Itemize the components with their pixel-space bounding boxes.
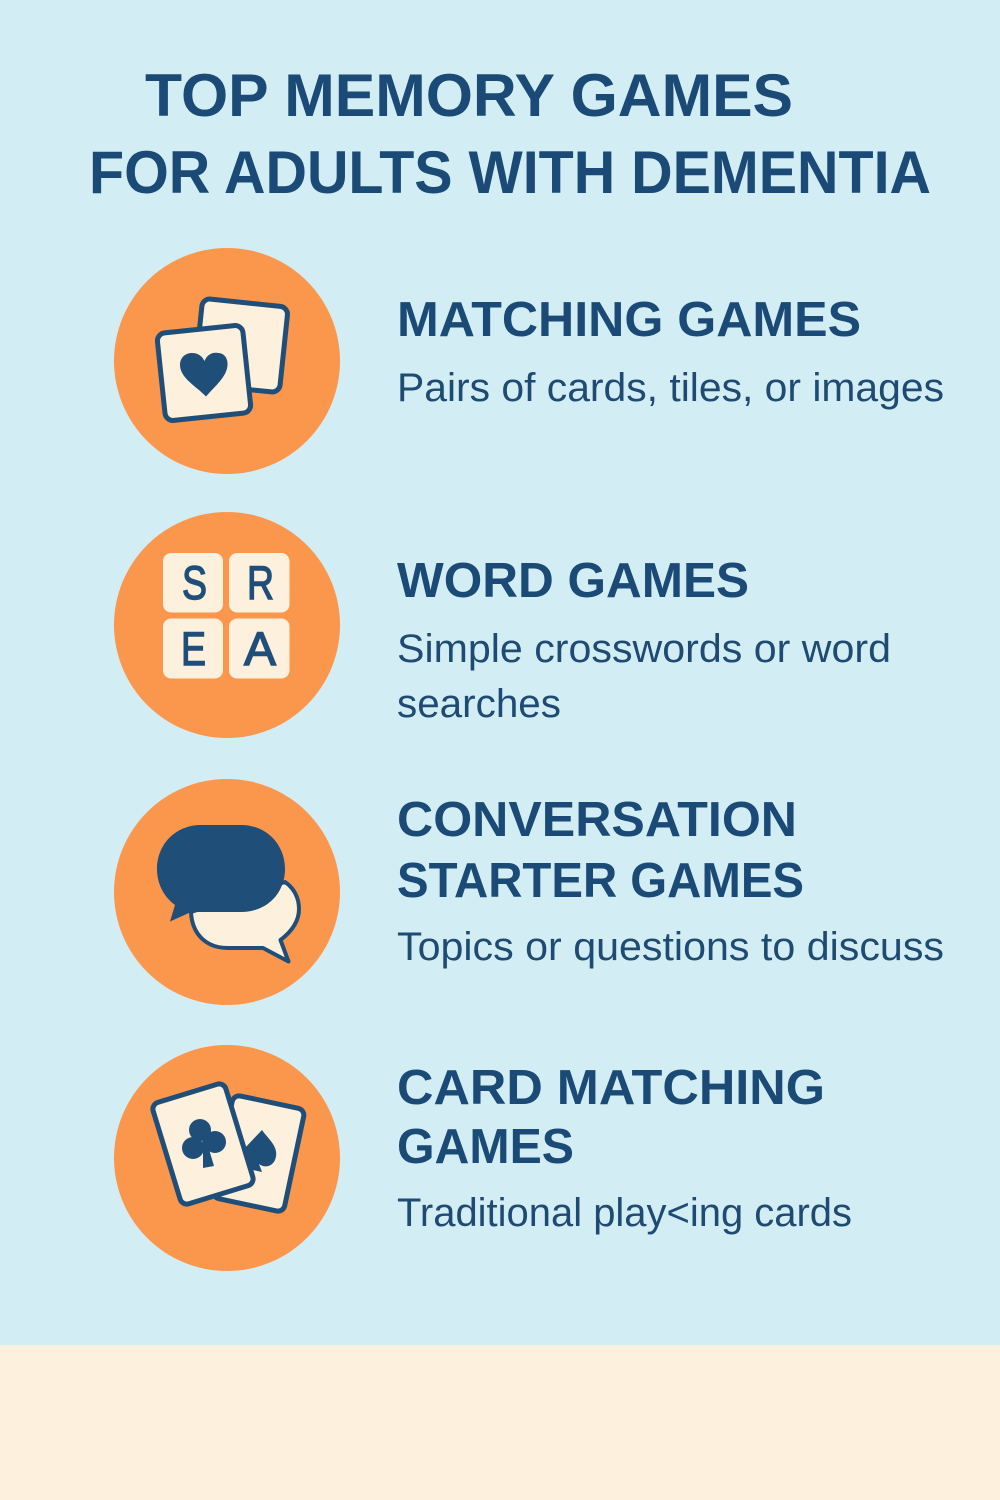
- footer band: cream: [0, 1345, 1000, 1500]
- panel: matching games: [114, 248, 944, 474]
- icon: letter tiles: A: [244, 622, 277, 675]
- heading: [397, 1061, 825, 1174]
- icon: letter tiles: S: [182, 556, 207, 609]
- description: Topics or questions to discuss: [397, 925, 944, 969]
- heading: MATCHING GAMES: [397, 293, 861, 347]
- title: [89, 62, 931, 206]
- heading: [397, 793, 804, 908]
- icon: letter tiles: R: [247, 556, 274, 609]
- panel: card matching games: [114, 1045, 852, 1271]
- description: Traditional play<ing cards: [397, 1191, 852, 1235]
- icon: two cards with heart: [114, 248, 340, 474]
- heading: CARD MATCHING: [397, 1061, 825, 1115]
- heading: CONVERSATION: [397, 793, 797, 847]
- heading: WORD GAMES: [397, 554, 749, 608]
- icon: letter tiles: E: [181, 622, 206, 675]
- icon: speech bubbles: [114, 779, 340, 1005]
- title: TOP MEMORY GAMES: [145, 62, 793, 129]
- panel: conversation starter games: [114, 779, 944, 1005]
- icon: letter tiles: [114, 512, 340, 738]
- panel: word games: [114, 512, 891, 738]
- icon: playing cards: [114, 1045, 340, 1271]
- description: Simple crosswords or word: [397, 627, 891, 671]
- description: searches: [397, 682, 561, 726]
- description: Pairs of cards, tiles, or images: [397, 366, 944, 410]
- description: [397, 627, 891, 726]
- heading: GAMES: [397, 1120, 574, 1174]
- title: FOR ADULTS WITH DEMENTIA: [89, 139, 931, 206]
- heading: STARTER GAMES: [397, 854, 804, 908]
